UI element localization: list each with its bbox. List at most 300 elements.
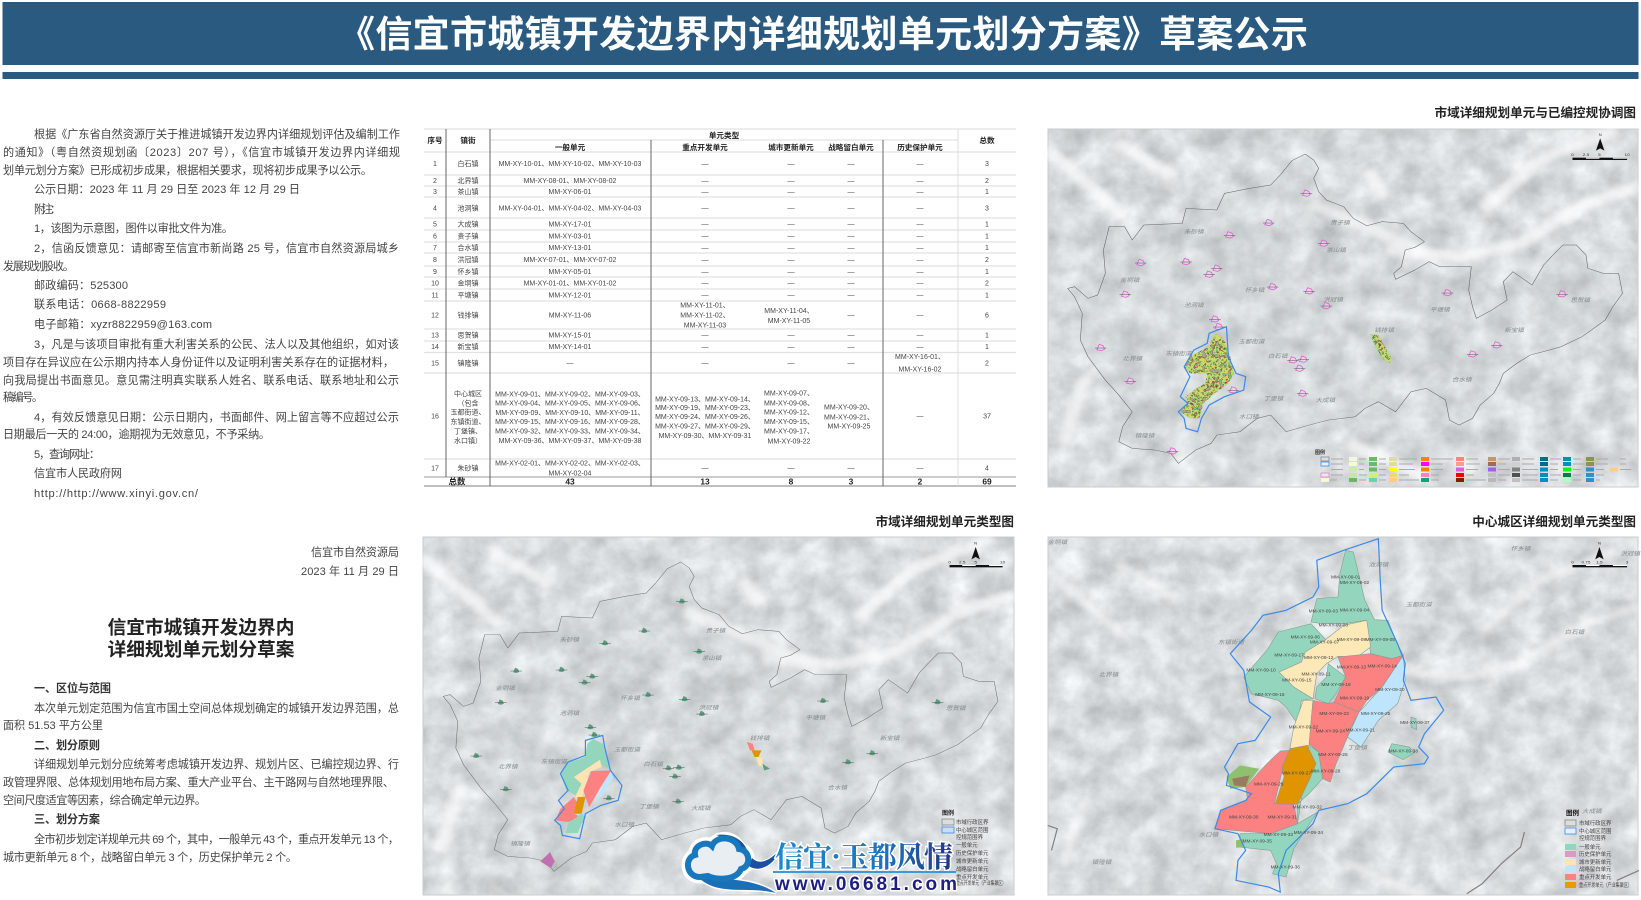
unit code labels: MM-XY-09-22 — [1289, 725, 1319, 729]
heading: central district map: 中心城区详细规划单元类型图 — [1472, 514, 1636, 529]
town labels: 金垌镇 — [1120, 276, 1140, 284]
table rows: 合水镇 — [458, 243, 478, 252]
table rows: — — [788, 189, 794, 196]
table rows: — — [848, 206, 854, 212]
table rows — [431, 159, 991, 478]
scale bar and north arrow: 0 — [1571, 152, 1574, 157]
legend: central district map: 市域行政区界 — [1579, 819, 1612, 827]
town labels: 镇隆镇 — [1092, 859, 1112, 866]
table rows: MM-XY-09-08、 — [764, 400, 814, 408]
table rows: MM-XY-11-02、 — [680, 312, 730, 320]
table rows: MM-XY-17-01 — [549, 222, 592, 228]
legend: central district map — [1565, 808, 1632, 889]
table rows: — — [702, 222, 708, 228]
table rows: 11 — [431, 292, 439, 300]
scale bar and north arrow: 3 — [1626, 560, 1629, 564]
table rows: 1 — [985, 222, 989, 228]
text block: issuer and date: 信宜市自然资源局 — [311, 545, 399, 559]
table rows: 水口镇） — [454, 436, 482, 445]
text block: public notice: 公示日期：2023 年 11 月 29 日至 2023 年 12 月 29 日 — [34, 182, 300, 196]
table rows: 13 — [431, 332, 439, 340]
table rows: MM-XY-13-01 — [549, 245, 592, 252]
table rows: 新宝镇 — [458, 342, 478, 351]
table rows: — — [916, 414, 924, 420]
table rows: — — [848, 344, 854, 351]
town labels: 洪冠镇 — [1323, 296, 1344, 303]
text block: public notice: 联系电话：0668-8822959 — [34, 298, 166, 311]
table rows: 5 — [433, 222, 437, 228]
table rows: 北界镇 — [458, 176, 478, 185]
unit code labels: MM-XY-09-31 — [1268, 815, 1297, 819]
unit code labels: MM-XY-09-20 — [1375, 687, 1405, 692]
table rows: — — [848, 222, 854, 228]
town labels: 怀乡镇 — [1245, 286, 1265, 294]
town labels: 贵子镇 — [706, 627, 726, 634]
table rows: MM-XY-09-15、 — [764, 419, 814, 426]
table rows: MM-XY-15-01 — [549, 332, 592, 340]
town labels: 合水镇 — [827, 784, 848, 791]
table rows: MM-XY-11-05 — [768, 318, 810, 325]
town labels: 丁堡镇 — [639, 803, 660, 810]
town labels: 池洞镇 — [1369, 561, 1389, 569]
table rows: — — [788, 466, 794, 472]
town labels: 白石镇 — [1565, 628, 1585, 636]
town labels: 思贺镇 — [946, 704, 966, 712]
town labels: 东镇街道 — [1218, 638, 1245, 646]
legend: city unit type map: 图例 — [942, 809, 954, 817]
table rows: MM-XY-16-02 — [899, 366, 942, 374]
table rows: 15 — [431, 360, 439, 368]
unit code labels: MM-XY-09-30 — [1229, 815, 1259, 819]
table rows: — — [916, 332, 924, 340]
table rows: 1 — [985, 269, 989, 276]
table rows: — — [916, 206, 924, 212]
town labels: 丁堡镇 — [1347, 744, 1368, 752]
central urban boundary — [555, 735, 622, 839]
table rows: MM-XY-09-36、MM-XY-09-37、MM-XY-09-38 — [499, 438, 641, 445]
heading: city unit type map: 市域详细规划单元类型图 — [875, 514, 1014, 529]
table rows: — — [702, 344, 708, 351]
table rows: 玉都街道、 — [450, 408, 486, 416]
table rows: MM-XY-05-01 — [549, 269, 592, 276]
table rows: — — [702, 178, 708, 185]
legend: city unit type map: 市域行政区界 — [956, 818, 989, 826]
table rows: — — [916, 257, 924, 264]
table rows: — — [788, 206, 794, 212]
table rows: — — [848, 332, 854, 340]
town labels — [495, 627, 966, 848]
table totals: 13 — [700, 476, 710, 486]
unit code labels: MM-XY-09-25 — [1361, 711, 1391, 716]
unit code labels: MM-XY-09-19 — [1340, 696, 1370, 700]
table rows: MM-XY-09-20、 — [824, 404, 874, 412]
table rows: MM-XY-09-09、MM-XY-09-10、MM-XY-09-11、 — [495, 410, 645, 417]
town unit plots — [470, 598, 943, 868]
table rows: — — [848, 466, 854, 472]
table rows: 2 — [985, 257, 989, 264]
table rows: MM-XY-11-03 — [684, 322, 726, 330]
unit code labels: MM-XY-09-28 — [1311, 769, 1341, 774]
table rows: MM-XY-09-04、MM-XY-09-05、MM-XY-09-06、 — [495, 400, 645, 408]
unit code labels: MM-XY-09-03 — [1309, 609, 1339, 613]
table rows: MM-XY-09-07、 — [764, 390, 814, 398]
table rows: — — [848, 280, 854, 288]
logo name: 信宜·玉都风情 — [775, 835, 953, 876]
scale bar and north arrow — [1571, 541, 1629, 567]
scale bar and north arrow: 0.75 — [1581, 560, 1591, 564]
table rows: 1 — [985, 332, 989, 340]
icon: cloud swirl — [688, 835, 780, 893]
table rows: 1 — [433, 161, 437, 168]
unit code labels: MM-XY-09-32 — [1292, 805, 1322, 809]
text block: draft sections: 详细规划单元划分应统筹考虑城镇开发边界、规划片区、已编控规边界、行 — [34, 757, 399, 771]
town labels: 水口镇 — [1239, 413, 1259, 421]
unit code labels: MM-XY-09-24 — [1316, 729, 1345, 733]
table header: 城市更新单元 — [768, 142, 814, 152]
table rows: MM-XY-14-01 — [549, 344, 592, 351]
table rows: MM-XY-09-19、MM-XY-09-23、 — [655, 405, 755, 412]
text block: public notice: 项目存在异议应在公示期内持本人身份证件以及证明利害关系存在的证据材料， — [3, 355, 394, 369]
table: unit classification — [424, 129, 1016, 486]
table header: 总数 — [979, 135, 995, 145]
text block: public notice: http://http://www.xinyi.gov.cn/ — [34, 488, 199, 500]
table rows: MM-XY-09-22 — [768, 438, 811, 446]
legend: central district map: 图例 — [1566, 808, 1580, 817]
table rows: 3 — [985, 161, 989, 168]
legend: city unit type map: 一般单元 — [956, 841, 978, 849]
unit code labels: MM-XY-09-36 — [1271, 865, 1301, 869]
table rows: MM-XY-07-01、MM-XY-07-02 — [524, 257, 617, 264]
table rows: — — [916, 292, 924, 300]
text block: public notice: 发展规划股收。 — [3, 259, 74, 273]
table rows: 1 — [985, 189, 989, 196]
town labels: 金垌镇 — [495, 684, 516, 692]
logo url: www.06681.com — [774, 874, 957, 895]
table header — [427, 130, 995, 152]
unit code labels: MM-XY-09-04 — [1340, 608, 1370, 613]
table rows: 钱排镇 — [458, 310, 478, 320]
table rows: MM-XY-09-01、MM-XY-09-02、MM-XY-09-03、 — [495, 392, 645, 398]
table rows: 1 — [985, 234, 989, 240]
historic patches — [1226, 765, 1259, 848]
table rows: 思贺镇 — [458, 330, 478, 340]
town labels — [1047, 538, 1641, 866]
legend: central district map: 重点开发单元 — [1579, 873, 1612, 881]
legend: city unit type map: 重点开发单元 — [956, 873, 989, 881]
table rows: — — [702, 257, 708, 264]
table rows: — — [848, 245, 854, 252]
unit code labels — [1229, 575, 1430, 869]
town labels: 新宝镇 — [880, 734, 900, 742]
subtitle: 详细规划单元划分草案 — [108, 639, 295, 660]
unit code labels: MM-XY-09-06 — [1291, 635, 1320, 639]
table header: 历史保护单元 — [897, 142, 943, 152]
table header: 序号 — [427, 135, 443, 145]
table rows: 金垌镇 — [458, 278, 478, 288]
town labels: 平塘镇 — [1430, 306, 1451, 313]
unit code labels: MM-XY-09-29 — [1254, 782, 1284, 787]
scale bar and north arrow — [1571, 132, 1630, 160]
table rows: MM-XY-12-01 — [549, 292, 592, 300]
unit code labels: MM-XY-09-23 — [1319, 711, 1349, 716]
text block: draft sections — [3, 681, 399, 864]
unit code labels: MM-XY-09-16 — [1255, 692, 1285, 697]
scale bar and north arrow — [948, 541, 1006, 567]
table header: 单元类型 — [709, 130, 740, 140]
table rows: 17 — [431, 466, 439, 472]
table rows: MM-XY-09-25 — [828, 424, 871, 430]
subtitle — [108, 617, 295, 660]
table rows: — — [788, 360, 794, 368]
town labels: 洪冠镇 — [1620, 550, 1641, 558]
table rows: 中心城区 — [454, 389, 482, 398]
unit code labels: MM-XY-09-37 — [1400, 720, 1430, 725]
table rows: — — [916, 466, 924, 472]
table rows: — — [788, 344, 794, 351]
text block: public notice: 电子邮箱：xyzr8822959@163.com — [34, 317, 212, 331]
town labels: 怀乡镇 — [620, 694, 641, 702]
text block: public notice: 的通知》（粤自然资规划函〔2023〕207 号），《信宜市城镇开发边界内详细规 — [3, 145, 400, 159]
unit code labels: MM-XY-09-34 — [1294, 830, 1324, 835]
town labels: 池洞镇 — [559, 709, 580, 717]
city boundary — [1068, 154, 1622, 463]
table totals: 69 — [982, 476, 992, 486]
legend: coordination map: 图例 — [1315, 449, 1325, 456]
unit code labels: MM-XY-09-17 — [1274, 653, 1304, 658]
table rows: — — [788, 332, 794, 340]
table rows: — — [788, 222, 794, 228]
legend: central district map: 一般单元 — [1579, 843, 1601, 851]
key development units — [1215, 654, 1403, 834]
table rows: 怀乡镇 — [458, 267, 478, 276]
table rows: MM-XY-01-01、MM-XY-01-02 — [524, 280, 617, 288]
central urban boundary — [1178, 327, 1246, 432]
table rows: MM-XY-09-17、 — [764, 428, 814, 436]
table rows: — — [916, 178, 924, 185]
table rows: — — [916, 312, 924, 320]
unit code labels: MM-XY-09-33 — [1264, 832, 1294, 837]
table rows: 8 — [433, 257, 437, 264]
heading: coordination map: 市域详细规划单元与已编控规协调图 — [1434, 105, 1636, 120]
subtitle: 信宜市城镇开发边界内 — [108, 617, 294, 638]
town labels: 朱砂镇 — [1184, 228, 1204, 236]
table rows: — — [702, 360, 708, 368]
table rows: 洪冠镇 — [458, 255, 478, 264]
table rows: 4 — [433, 206, 437, 212]
scale bar and north arrow: 5 — [974, 560, 978, 564]
legend: central district map: 城市更新单元 — [1579, 858, 1612, 866]
table rows: 贵子镇 — [458, 232, 478, 240]
town labels: 丁堡镇 — [1264, 395, 1284, 402]
town labels: 朱砂镇 — [559, 636, 580, 644]
unit code labels: MM-XY-09-21 — [1346, 728, 1375, 733]
town labels: 贵子镇 — [1330, 219, 1351, 226]
table rows: MM-XY-02-04 — [549, 470, 592, 478]
table rows: — — [916, 344, 924, 351]
text block: issuer and date: 2023 年 11 月 29 日 — [301, 564, 399, 578]
table totals: 43 — [565, 476, 575, 486]
town regulatory plots — [1095, 190, 1568, 454]
town labels: 北界镇 — [1099, 671, 1119, 679]
unit code labels: MM-XY-09-14 — [1367, 664, 1397, 669]
table rows: 朱砂镇 — [458, 464, 478, 472]
table totals: 3 — [849, 476, 854, 486]
table rows: MM-XY-09-13、MM-XY-09-14、 — [655, 396, 755, 404]
unit code labels: MM-XY-09-26 — [1318, 752, 1348, 757]
town labels: 金垌镇 — [1047, 538, 1068, 546]
town labels: 白石镇 — [1268, 352, 1288, 360]
table rows: 丁堡镇、 — [454, 426, 482, 436]
table rows: — — [916, 189, 924, 196]
table rows: 大成镇 — [458, 220, 478, 228]
unit code labels: MM-XY-09-13 — [1337, 665, 1367, 669]
table rows: 白石镇 — [458, 159, 478, 168]
town labels: 茶山镇 — [702, 654, 722, 662]
text block: public notice: 2，信函反馈意见：请邮寄至信宜市新尚路 25 号，信宜市自然资源局城乡 — [34, 241, 399, 255]
city boundary — [443, 562, 998, 871]
text block: public notice: 3，凡是与该项目审批有重大利害关系的公民、法人以及其他组织，如对该 — [34, 337, 399, 351]
legend: city unit type map: 中心城区范围 — [956, 826, 988, 834]
table rows: — — [702, 206, 708, 212]
unit code labels: MM-XY-09-11 — [1302, 672, 1331, 677]
table rows: MM-XY-11-06 — [549, 312, 591, 320]
text block: draft sections: 本次单元划定范围为信宜市国土空间总体规划确定的城镇开发边界范围，总 — [34, 701, 399, 715]
text block: public notice: 日期最后一天的 24:00，逾期视为无效意见，不予采纳。 — [3, 427, 270, 441]
table rows: — — [848, 312, 854, 320]
section one: 一、区位与范围 — [34, 681, 111, 695]
table rows: MM-XY-09-27、MM-XY-09-29、 — [655, 424, 755, 430]
table rows: 12 — [431, 312, 439, 320]
town labels: 北界镇 — [498, 763, 518, 770]
table header: 重点开发单元 — [682, 142, 728, 152]
text block: public notice: 向我局提出书面意见。意见需注明真实联系人姓名、联系电话、联系地址和公示 — [3, 373, 399, 387]
title banner — [2, 2, 1638, 65]
unit code labels: MM-XY-09-12 — [1304, 655, 1334, 660]
table rows: — — [788, 269, 794, 276]
scale bar and north arrow: 5 — [1598, 152, 1601, 157]
text block: public notice: 1，该图为示意图，图件以审批文件为准。 — [34, 221, 233, 235]
text block: draft sections: 城市更新单元 8 个，战略留白单元 3 个，历史保护单元 2 个。 — [3, 850, 297, 864]
text block: public notice: 根据《广东省自然资源厅关于推进城镇开发边界内详细规划评估及编制工作 — [34, 127, 400, 141]
legend: city unit type map: 战略留白单元 — [956, 865, 989, 873]
text block: public notice: 邮政编码：525300 — [34, 278, 128, 292]
table rows: MM-XY-09-15、MM-XY-09-16、MM-XY-09-28、 — [495, 419, 645, 426]
unit code labels: MM-XY-09-09 — [1337, 637, 1367, 642]
table rows: — — [848, 360, 854, 368]
general units — [1240, 550, 1417, 877]
central urban unit types — [555, 739, 770, 833]
town labels: 北界镇 — [1122, 355, 1143, 362]
legend: central district map: 控规范围界 — [1579, 834, 1607, 842]
town labels: 水口镇 — [614, 821, 635, 829]
table rows: — — [702, 269, 708, 276]
text block: public notice: 4，有效反馈意见日期：公示日期内，书面邮件、网上留言等不应超过公示 — [34, 410, 399, 424]
table rows: MM-XY-11-01、 — [680, 302, 730, 310]
logo watermark — [688, 835, 957, 895]
table rows: — — [916, 234, 924, 240]
table rows: — — [702, 466, 708, 472]
table rows: 3 — [433, 189, 437, 196]
unit code labels: MM-XY-09-08 — [1319, 623, 1349, 628]
table totals: 2 — [918, 476, 923, 486]
table rows: 茶山镇 — [458, 187, 478, 196]
table rows: — — [848, 292, 854, 300]
unit code labels: MM-XY-09-07 — [1310, 640, 1340, 644]
industrial key development unit — [1275, 745, 1316, 804]
town labels: 新宝镇 — [1504, 326, 1525, 334]
town labels: 东镇街道 — [1165, 350, 1192, 357]
table rows: MM-XY-09-24、MM-XY-09-26、 — [655, 414, 755, 421]
table rows: — — [788, 178, 794, 185]
table rows: — — [702, 280, 708, 288]
text block: public notice: 信宜市人民政府网 — [34, 466, 122, 480]
town labels: 平塘镇 — [806, 714, 826, 721]
unit code labels: MM-XY-09-05 — [1366, 637, 1395, 642]
legend: city unit type map: 重点开发单元（产业集聚区） — [956, 879, 1006, 887]
table rows: — — [788, 292, 794, 300]
scale bar and north arrow: N — [974, 541, 977, 545]
town labels: 东镇街道 — [541, 758, 568, 765]
table rows: 1 — [985, 292, 989, 300]
table rows: 池洞镇 — [458, 204, 478, 212]
legend: city unit type map: 控规范围界 — [956, 833, 984, 841]
legend: city unit type map: 城市更新单元 — [956, 857, 989, 865]
legend: city unit type map — [942, 809, 1006, 887]
scale bar and north arrow: 2.5 — [959, 560, 966, 564]
unit code labels: MM-XY-09-10 — [1246, 668, 1276, 673]
main title: 《信宜市城镇开发边界内详细规划单元划分方案》草案公示 — [338, 14, 1308, 55]
town labels: 镇隆镇 — [1135, 432, 1155, 440]
town labels: 合水镇 — [1452, 376, 1472, 383]
section three: 三、划分方案 — [34, 812, 100, 826]
renewal units — [1279, 620, 1371, 749]
table rows: 14 — [431, 344, 439, 351]
table rows: — — [702, 292, 708, 300]
scale bar and north arrow: N — [1599, 132, 1602, 137]
table rows: 10 — [431, 280, 439, 288]
table rows: — — [702, 189, 708, 196]
table rows: MM-XY-09-32、MM-XY-09-33、MM-XY-09-34、 — [495, 428, 645, 436]
town labels — [1120, 219, 1591, 440]
central district boundary — [1215, 539, 1444, 892]
town labels: 池洞镇 — [1184, 301, 1204, 309]
scale bar and north arrow: 2.5 — [1583, 152, 1590, 157]
legend: city unit type map: 历史保护单元 — [956, 849, 989, 857]
table rows: — — [848, 234, 854, 240]
town labels: 镇隆镇 — [510, 840, 531, 848]
table rows: — — [848, 178, 854, 185]
table rows: — — [788, 257, 794, 264]
town labels: 大成镇 — [691, 804, 711, 812]
table rows: 平塘镇 — [458, 290, 478, 300]
table header: 镇街 — [460, 135, 476, 145]
text block: draft sections: 空间尺度适宜等因素，综合确定单元边界。 — [3, 793, 206, 807]
strategic reserve units — [1348, 655, 1405, 747]
table rows: MM-XY-06-01 — [549, 189, 592, 196]
town labels: 大成镇 — [1582, 807, 1602, 815]
table header: 一般单元 — [555, 142, 586, 152]
town labels: 钱排镇 — [750, 734, 770, 742]
unit code labels: MM-XY-09-27 — [1282, 771, 1312, 775]
panel: coordination map — [1048, 129, 1639, 487]
unit code labels: MM-XY-09-35 — [1243, 839, 1272, 843]
town labels: 白石镇 — [643, 760, 664, 768]
table rows: — — [566, 360, 574, 368]
table rows: MM-XY-11-04、 — [764, 308, 814, 315]
unit code labels: MM-XY-09-18 — [1321, 682, 1351, 687]
table rows: — — [788, 234, 794, 240]
table rows: MM-XY-09-30、MM-XY-09-31 — [659, 433, 752, 440]
